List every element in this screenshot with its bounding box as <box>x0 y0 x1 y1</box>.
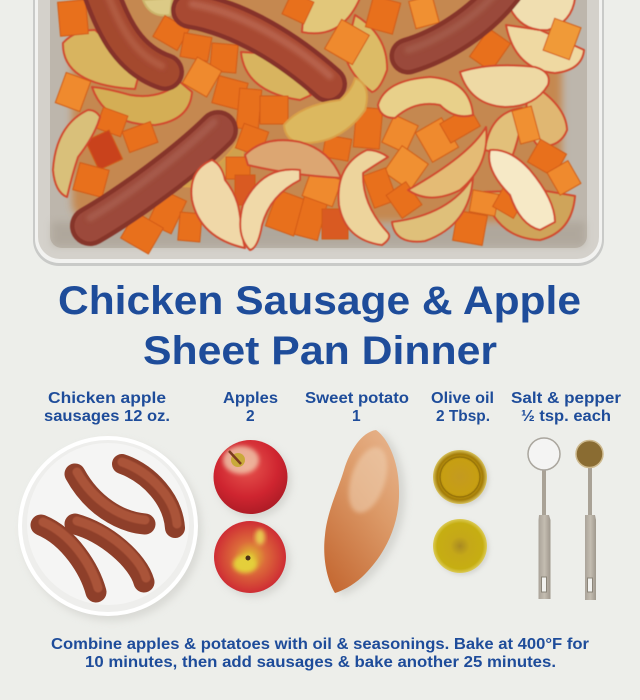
label: sausages: sausages 12 oz. <box>44 408 170 425</box>
title <box>58 279 581 373</box>
sausages in pan <box>90 0 505 226</box>
title: Chicken Sausage & Apple <box>58 279 581 323</box>
icon: olive oil bottom dish <box>433 519 489 575</box>
pan tray <box>33 0 604 266</box>
label: sweet potato: 1 <box>352 408 361 425</box>
apple slices under layer <box>63 0 584 240</box>
label: sausages <box>44 390 170 425</box>
label: sausages: Chicken apple <box>48 390 166 407</box>
plate <box>18 436 202 621</box>
label: olive oil: Olive oil <box>431 390 494 407</box>
label: apples: Apples <box>223 390 278 407</box>
label: salt and pepper: Salt & pepper <box>511 390 621 407</box>
instructions: Combine apples & potatoes with oil & seasonings. Bake at 400°F for <box>51 636 589 653</box>
sweet potato cubes <box>55 0 581 254</box>
raw sausages <box>41 462 177 592</box>
title: Sheet Pan Dinner <box>143 329 497 373</box>
warm roasted underlay <box>72 0 562 222</box>
sheet pan photo <box>33 0 604 266</box>
plate of sausages <box>18 436 202 621</box>
icon: bottom apple <box>214 521 290 597</box>
instructions <box>51 636 589 671</box>
icon: salt spoon <box>528 438 560 599</box>
label: olive oil: 2 Tbsp. <box>436 408 490 425</box>
icon: top apple <box>214 440 291 518</box>
label: sweet potato: Sweet potato <box>305 390 409 407</box>
apple slices top layer <box>53 65 555 250</box>
icon: pepper spoon <box>576 440 603 600</box>
icon: olive oil top dish <box>433 450 489 506</box>
icon: sweet potato <box>324 430 405 596</box>
label: apples: 2 <box>246 408 255 425</box>
label: sweet potato <box>305 390 409 425</box>
label: salt and pepper <box>511 390 621 425</box>
label: apples <box>223 390 278 425</box>
instructions: 10 minutes, then add sausages & bake another 25 minutes. <box>85 654 556 671</box>
label: salt and pepper: ½ tsp. each <box>521 408 611 425</box>
label: olive oil <box>431 390 494 425</box>
